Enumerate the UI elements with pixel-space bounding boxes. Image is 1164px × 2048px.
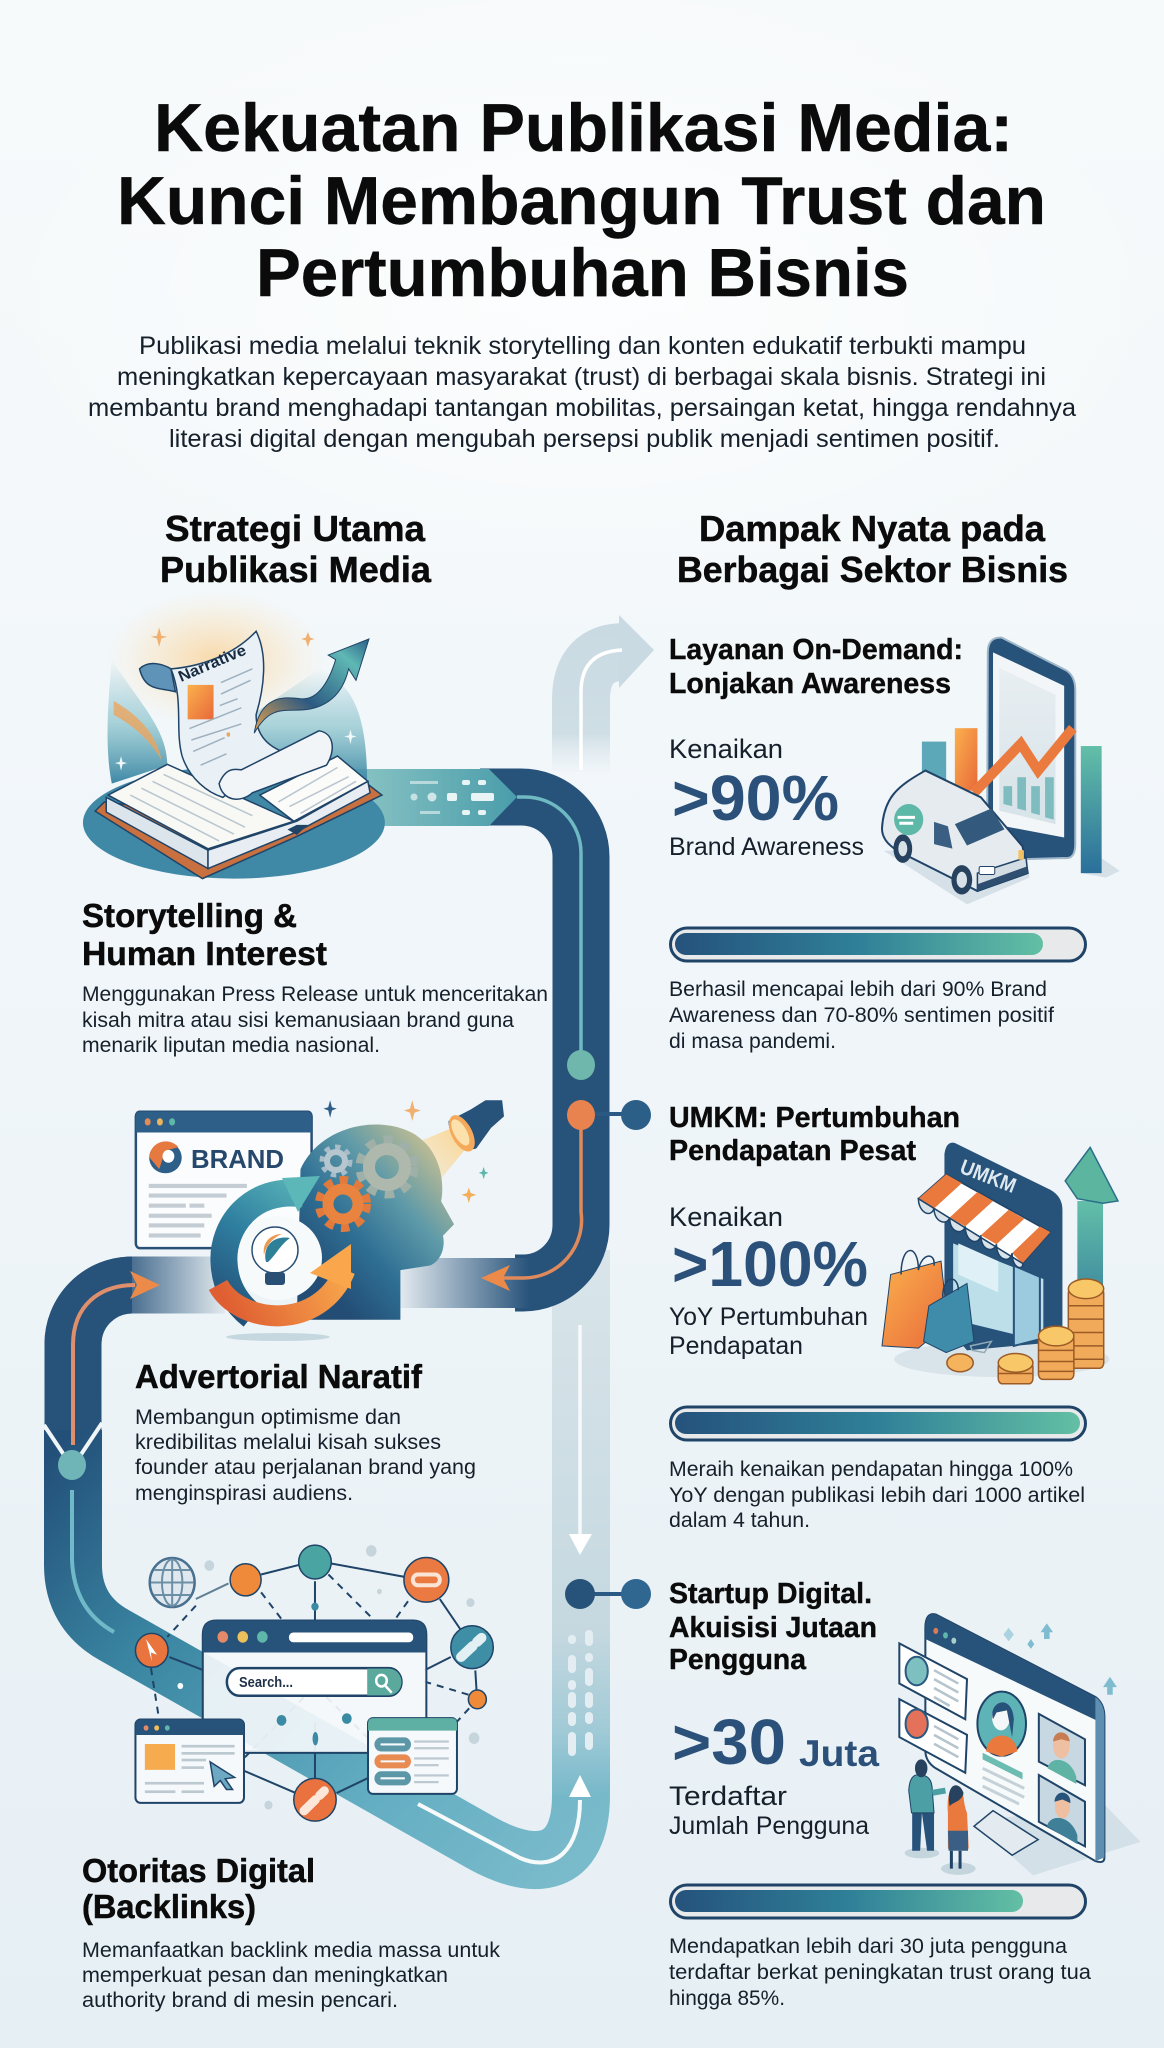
panel: startup digital: hingga 85%. <box>669 1987 785 2010</box>
arrow: orange left <box>130 1271 160 1299</box>
title: Kekuatan Publikasi Media: <box>154 90 1013 166</box>
panel: storytelling text: menarik liputan media nasional. <box>82 1034 380 1057</box>
illustration: UMKM store and coins <box>882 1143 1118 1384</box>
progress bar 90 <box>670 928 1086 961</box>
light rising band with arrow <box>552 615 654 1800</box>
panel: umkm: Kenaikan <box>669 1202 783 1232</box>
illustration: storytelling book <box>83 591 385 879</box>
panel: umkm: Pendapatan <box>669 1332 803 1360</box>
node: teal on right pipe <box>567 1050 595 1080</box>
panel: layanan on-demand: Lonjakan Awareness <box>669 668 951 700</box>
panel: startup digital: >30 <box>672 1706 786 1778</box>
panel: umkm <box>669 1102 1086 1532</box>
panel: startup digital <box>669 1578 1091 2010</box>
gears <box>320 1141 413 1227</box>
illustration: storytelling book: Narrative <box>176 642 249 686</box>
progress bar 100 <box>670 1407 1086 1440</box>
white bottom arrow <box>418 1800 580 1863</box>
node: navy pair <box>565 1579 651 1609</box>
panel: layanan on-demand: Awareness dan 70-80% sentimen positif <box>669 1004 1054 1027</box>
brand text: BRAND <box>191 1144 284 1174</box>
illustration: UMKM store and coins: UMKM <box>957 1156 1019 1198</box>
heading: strategi <box>160 508 432 590</box>
illustration: user dashboard <box>899 1614 1140 1875</box>
heading: dampak <box>677 508 1068 590</box>
panel: storytelling text <box>82 897 548 1057</box>
intro paragraph: meningkatkan kepercayaan masyarakat (trust) di berbagai skala bisnis. Strategi ini <box>117 363 1046 391</box>
inner lines <box>517 797 581 1052</box>
panel: umkm: Meraih kenaikan pendapatan hingga 100% <box>669 1458 1073 1481</box>
panel: startup digital: Akuisisi Jutaan <box>669 1612 877 1644</box>
data dots <box>410 780 494 815</box>
panel: layanan on-demand <box>669 634 1086 1053</box>
intro paragraph: membantu brand menghadapi tantangan mobilitas, persaingan ketat, hingga rendahnya <box>88 394 1076 422</box>
pipeline: flow road <box>44 615 654 1863</box>
panel: layanan on-demand: Brand Awareness <box>669 833 864 861</box>
title: Kunci Membangun Trust dan <box>117 163 1046 239</box>
panel: otoritas text: memperkuat pesan dan meningkatkan <box>82 1964 448 1987</box>
panel: startup digital: Terdaftar <box>669 1781 787 1811</box>
panel: startup digital: Mendapatkan lebih dari 30 juta pengguna <box>669 1935 1067 1958</box>
panel: advertorial text: kredibilitas melalui kisah sukses <box>135 1431 441 1454</box>
panel: startup digital: Startup Digital. <box>669 1578 872 1610</box>
panel: umkm: Pendapatan Pesat <box>669 1135 916 1167</box>
panel: otoritas text: Memanfaatkan backlink media massa untuk <box>82 1939 501 1962</box>
panel: otoritas text: Otoritas Digital <box>82 1852 315 1889</box>
data dashes <box>568 1630 593 1756</box>
panel: advertorial text: founder atau perjalanan brand yang <box>135 1456 476 1479</box>
heading: dampak: Dampak Nyata pada <box>699 508 1046 549</box>
intro paragraph: Publikasi media melalui teknik storytelling dan konten edukatif terbukti mampu <box>139 332 1026 360</box>
node: orange and connector <box>567 1100 651 1130</box>
panel: otoritas text <box>82 1852 501 2012</box>
heading: strategi: Publikasi Media <box>160 549 432 590</box>
intro paragraph: literasi digital dengan mengubah persepsi publik menjadi sentimen positif. <box>169 425 1000 453</box>
panel: layanan on-demand: >90% <box>672 762 839 834</box>
heading: dampak: Berbagai Sektor Bisnis <box>677 549 1068 590</box>
panel: umkm: YoY dengan publikasi lebih dari 1000 artikel <box>669 1484 1085 1507</box>
panel: layanan on-demand: Kenaikan <box>669 734 783 764</box>
panel: storytelling text: Human Interest <box>82 935 327 972</box>
illustration: brand window and head <box>136 1100 504 1341</box>
intro paragraph <box>88 332 1076 453</box>
illustration: phone, van and chart <box>882 638 1120 904</box>
title <box>117 90 1046 311</box>
panel: startup digital: terdaftar berkat peningkatan trust orang tua <box>669 1961 1091 1984</box>
illustration: search network: Search... <box>239 1675 293 1691</box>
panel: startup digital: Pengguna <box>669 1644 807 1676</box>
panel: layanan on-demand: Layanan On-Demand: <box>669 634 963 666</box>
panel: layanan on-demand: Berhasil mencapai lebih dari 90% Brand <box>669 978 1047 1001</box>
swirl ring <box>234 1216 322 1300</box>
lower teal section <box>73 1430 581 1860</box>
panel: advertorial text: Advertorial Naratif <box>135 1358 423 1395</box>
panel: startup digital: Juta <box>799 1733 879 1774</box>
panel: umkm: UMKM: Pertumbuhan <box>669 1102 960 1134</box>
upper navy section <box>400 797 581 1283</box>
lightbulb <box>252 1227 298 1273</box>
panel: otoritas text: (Backlinks) <box>82 1888 256 1925</box>
panel: advertorial text <box>135 1358 476 1505</box>
panel: advertorial text: menginspirasi audiens. <box>135 1482 353 1505</box>
progress bar 30 juta <box>670 1885 1086 1918</box>
panel: umkm: dalam 4 tahun. <box>669 1509 810 1532</box>
white chevron <box>44 1423 102 1458</box>
panel: storytelling text: Storytelling & <box>82 897 297 934</box>
node: teal on left pipe <box>58 1450 86 1480</box>
left navy section <box>73 1285 225 1430</box>
illustration: search network <box>135 1545 493 1821</box>
white arrow line down <box>578 1325 582 1540</box>
panel: storytelling text: Menggunakan Press Release untuk menceritakan <box>82 983 548 1006</box>
panel: umkm: >100% <box>672 1228 868 1300</box>
arrow: orange right <box>481 1265 510 1291</box>
panel: storytelling text: kisah mitra atau sisi kemanusiaan brand guna <box>82 1009 514 1032</box>
teal connector head <box>340 769 517 826</box>
title: Pertumbuhan Bisnis <box>256 235 909 311</box>
panel: layanan on-demand: di masa pandemi. <box>669 1030 836 1053</box>
panel: advertorial text: Membangun optimisme dan <box>135 1406 401 1429</box>
heading: strategi: Strategi Utama <box>165 508 426 549</box>
panel: startup digital: Jumlah Pengguna <box>669 1812 869 1840</box>
panel: otoritas text: authority brand di mesin pencari. <box>82 1989 398 2012</box>
panel: umkm: YoY Pertumbuhan <box>669 1303 868 1331</box>
